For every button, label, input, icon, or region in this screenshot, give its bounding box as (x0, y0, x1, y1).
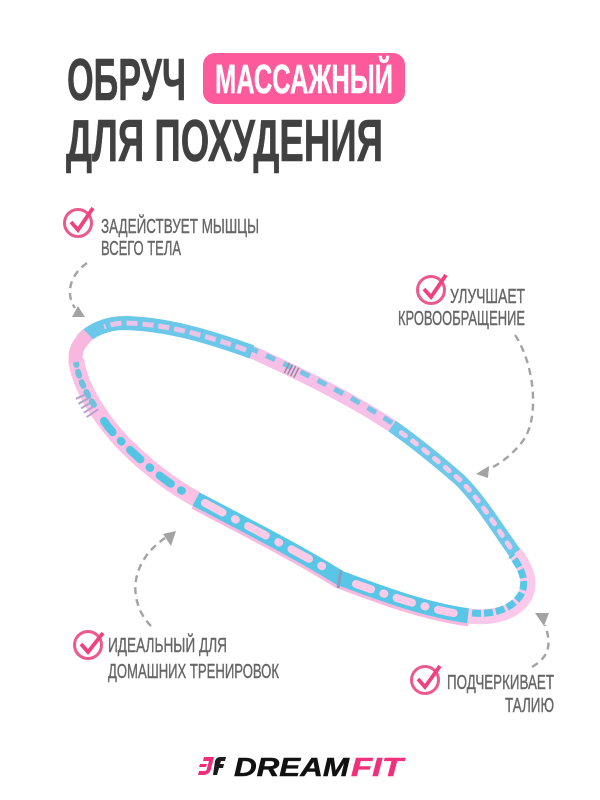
label (101, 214, 259, 260)
logo mark (198, 757, 226, 775)
hoop: right bend (468, 553, 528, 617)
label: КРОВООБРАЩЕНИЕ (398, 308, 525, 330)
hoop (75, 323, 528, 619)
arrow (135, 531, 176, 626)
badge: massage: МАССАЖНЫЙ (215, 56, 393, 102)
label (447, 672, 554, 717)
hoop: right blue section (392, 426, 515, 553)
logo wordmark: DREAM (234, 752, 351, 782)
logo: DreamFit: FIT (351, 752, 406, 782)
hoop: top blue section (76, 323, 252, 362)
arrow (476, 335, 533, 478)
icon: check (418, 275, 446, 304)
label: ВСЕГО ТЕЛА (101, 238, 181, 260)
callout: waist (412, 613, 554, 717)
hoop: bottom blue section (195, 499, 470, 619)
label: ЗАДЕЙСТВУЕТ МЫШЦЫ (101, 214, 259, 238)
icon: check (412, 666, 440, 694)
icon: check (74, 632, 103, 658)
label (398, 286, 525, 330)
title line 1: ОБРУЧ (67, 47, 186, 113)
label: ИДЕАЛЬНЫЙ ДЛЯ (108, 633, 227, 657)
title (66, 47, 405, 174)
callout: home workouts (74, 531, 279, 683)
callout: muscles (64, 208, 259, 317)
hoop: upper pink section (252, 349, 392, 426)
hoop: lower-left pink section (75, 350, 196, 499)
title line 2: ДЛЯ ПОХУДЕНИЯ (66, 108, 383, 174)
arrow (532, 613, 549, 667)
label: ДОМАШНИХ ТРЕНИРОВОК (108, 661, 279, 683)
label (108, 633, 279, 683)
label: УЛУЧШАЕТ (450, 286, 525, 308)
badge: massage (203, 53, 405, 104)
label: ТАЛИЮ (505, 695, 554, 717)
icon: check (64, 208, 93, 236)
arrow (70, 263, 87, 317)
logo: DreamFit (198, 752, 406, 782)
callout: circulation (398, 275, 533, 478)
